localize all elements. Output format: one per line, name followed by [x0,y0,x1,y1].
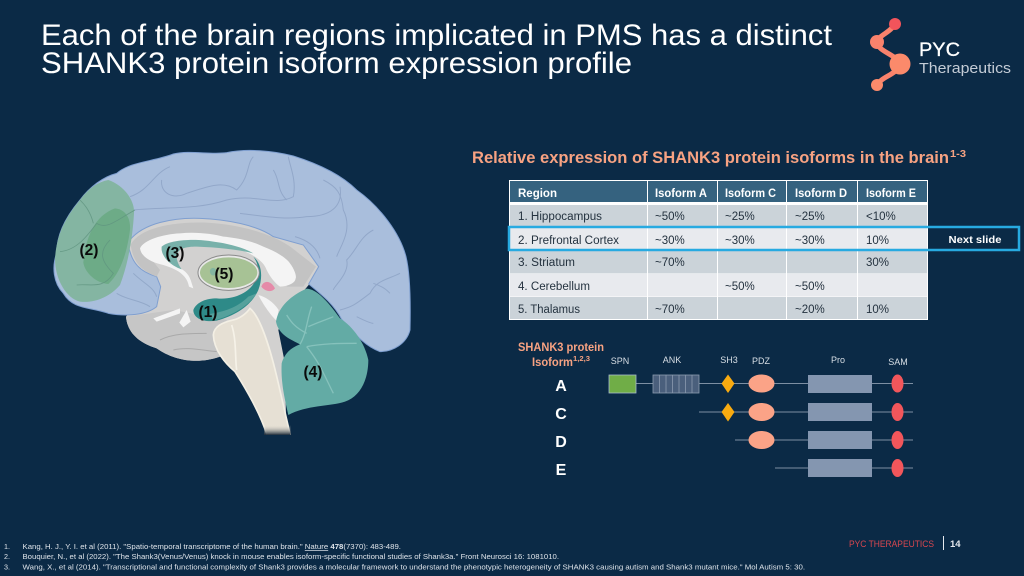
isoform diagram heading: Isoform [532,357,573,369]
table rows: 4. Cerebellum [518,281,590,293]
brain region labels: (5) [215,266,233,283]
table rows: 10% [866,304,889,316]
domain labels: Pro [831,355,845,365]
domain labels: ANK [663,355,681,365]
brain illustration [54,150,410,435]
title [41,19,832,80]
isoform A domain row [609,374,913,393]
references: 2. [4,552,10,561]
region 5: thalamus [198,255,259,290]
table header: Isoform C [725,188,776,200]
isoform E domain row [775,459,913,477]
brain region labels: (1) [199,304,217,321]
table rows: ~25% [725,211,755,223]
table header: Isoform A [655,188,707,200]
table rows: 2. Prefrontal Cortex [518,235,619,247]
isoform diagram heading [518,342,604,369]
table header: Region [518,188,557,200]
title: Each of the brain regions implicated in PMS has a distinct [41,19,832,52]
domain labels: SAM [888,357,908,367]
white aqueduct space [258,295,279,321]
isoform letters: D [555,434,567,451]
brain region labels: (3) [166,245,184,262]
table: isoform expression by region [509,180,928,320]
references: Kang, H. J., Y. I. et al (2011). "Spatio-temporal transcriptome of the human brain." Nature 478(7370): 483-489. [22,542,401,551]
isoform diagram heading: 1,2,3 [573,354,590,363]
isoform D domain row [735,431,913,449]
isoform letters: C [555,406,567,423]
table rows: 10% [866,235,889,247]
table rows: ~70% [655,304,685,316]
references: Bouquier, N., et al (2022). "The Shank3(Venus/Venus) knock in mouse enables isoform-specific functional studies of Shank3a." Front Neurosci 16: 1081010. [22,552,559,561]
callout: next slide highlight [509,227,1019,250]
region 1: hippocampus [193,257,261,321]
gray base of inner brain [125,213,327,416]
isoform letters: E [556,462,567,479]
corpus callosum [140,233,296,288]
footer brand and page number [849,536,961,550]
footer brand and page number: 14 [950,539,961,550]
table header: Isoform D [795,188,847,200]
heading: relative expression: 1-3 [950,149,966,160]
table rows: ~50% [655,211,685,223]
logo: PYC Therapeutics [870,18,1011,91]
sulci lines [117,157,400,323]
table rows: ~30% [795,235,825,247]
table rows: 30% [866,257,889,269]
table header [510,181,927,202]
isoform letters [555,378,567,479]
brainstem [213,308,290,434]
table rows: ~25% [795,211,825,223]
table rows [518,211,896,316]
heading: relative expression: Relative expression of SHANK3 protein isoforms in the brain [472,149,949,167]
table rows: ~50% [795,281,825,293]
domain labels [611,355,908,367]
pink pineal structure [261,282,275,291]
brain region labels: (2) [80,242,98,259]
title: SHANK3 protein isoform expression profile [41,47,632,80]
table rows: <10% [866,211,896,223]
region 4: cerebellum [276,289,368,415]
brain region labels [80,242,322,381]
white fornix and lower structures [153,308,191,327]
references: 3. [4,562,10,572]
brain region labels: (4) [304,364,322,381]
domain labels: PDZ [752,356,771,366]
inner gray band [131,223,316,287]
inner prefrontal highlight [83,208,130,284]
isoform C domain row [699,403,913,422]
table rows: ~70% [655,257,685,269]
cortex [54,150,410,352]
footer brand and page number: PYC THERAPEUTICS [849,539,934,550]
table rows: 1. Hippocampus [518,211,602,223]
table rows: 3. Striatum [518,257,575,269]
table rows: 5. Thalamus [518,304,580,316]
region 2: prefrontal cortex [55,180,134,302]
references: Wang, X., et al (2014). "Transcriptional and functional complexity of Shank3 provides a molecular framework to understand the phenotypic heterogeneity of SHANK3 causing autism and Shank3 mutant mice." Mol Autism 5: 30. [22,562,805,572]
lower temporal lobe [126,310,227,361]
table rows: ~20% [795,304,825,316]
callout: next slide highlight: Next slide [948,234,1002,246]
references [4,542,805,572]
region 3: striatum [162,240,253,269]
isoform diagram heading: SHANK3 protein [518,342,604,354]
isoform letters: A [555,378,567,395]
domain labels: SH3 [720,355,738,365]
logo: PYC Therapeutics: PYC [919,39,960,61]
logo: PYC Therapeutics: Therapeutics [919,60,1011,77]
table rows: ~50% [725,281,755,293]
references: 1. [4,542,10,551]
table rows: ~30% [725,235,755,247]
table rows: ~30% [655,235,685,247]
domain labels: SPN [611,356,629,366]
table header: Isoform E [866,188,916,200]
